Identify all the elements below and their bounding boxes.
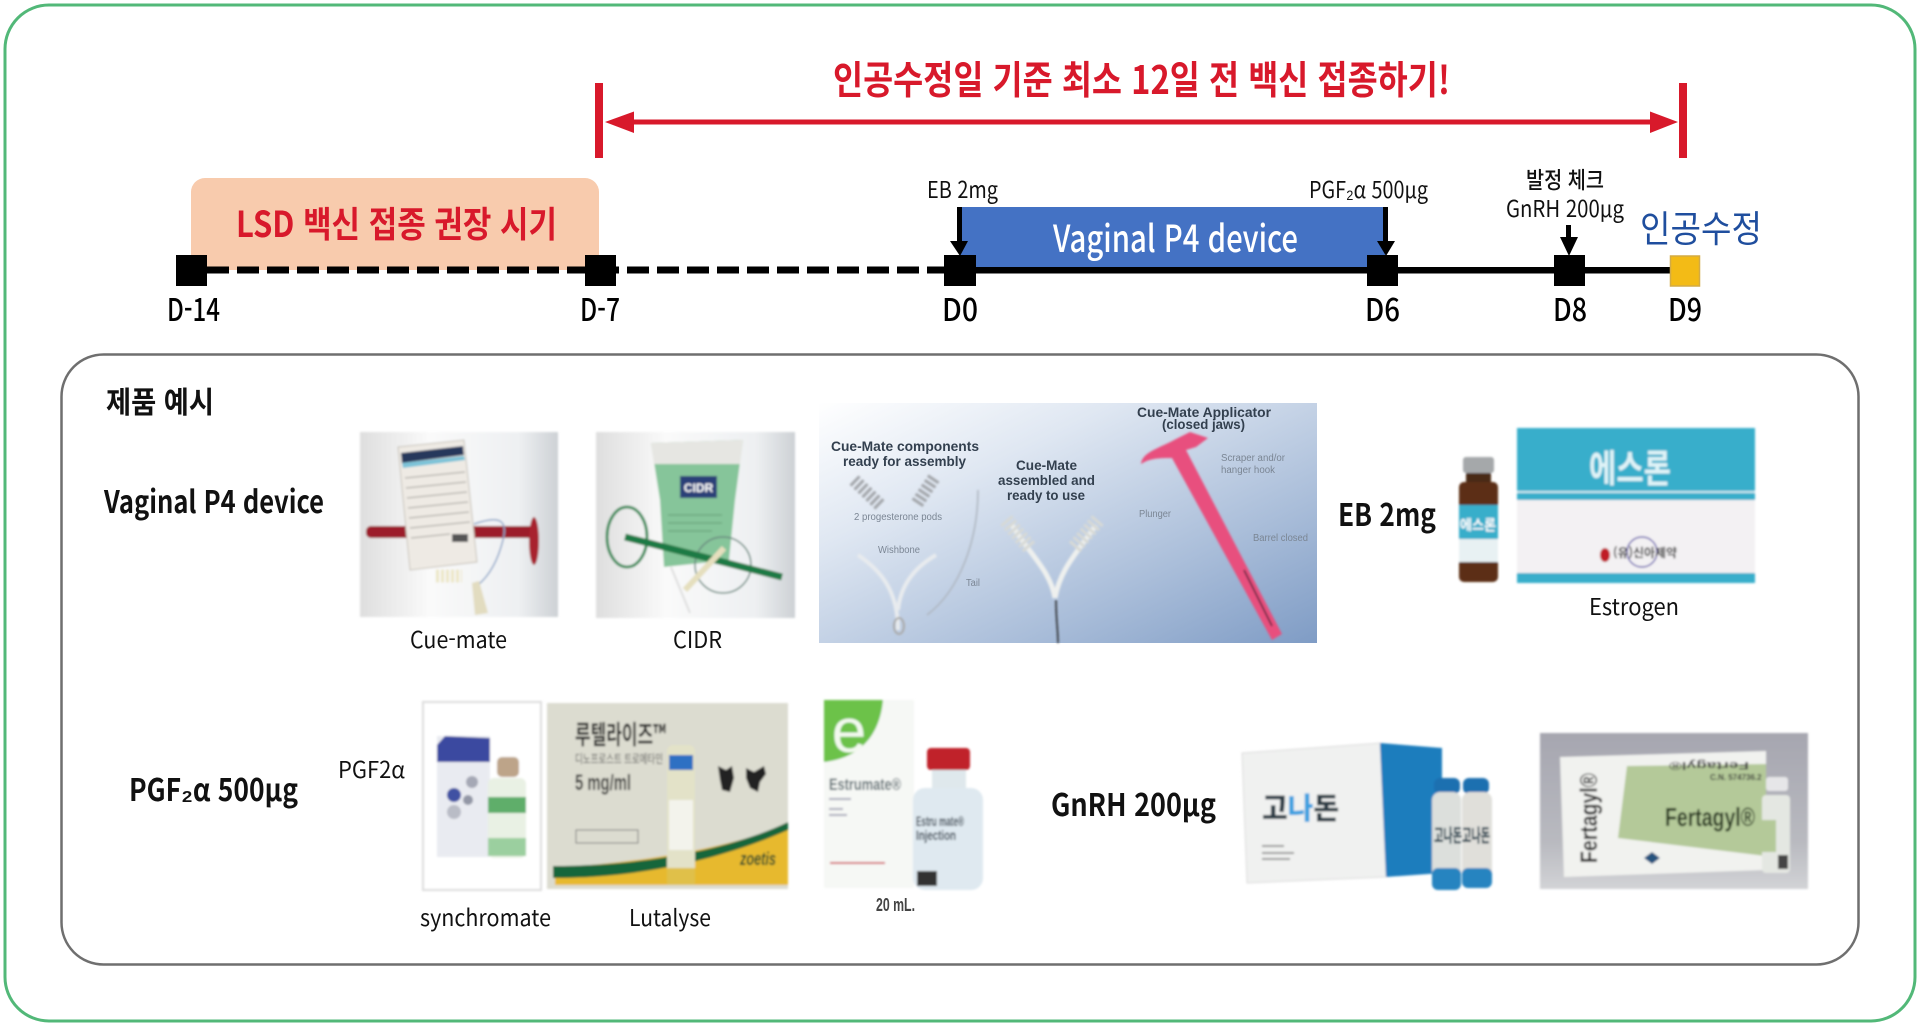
red double arrow span — [595, 83, 1687, 158]
photo: Lutalyse box: 5 mg/ml — [575, 770, 631, 795]
photo: estrogen vial: 에스론 — [1460, 515, 1496, 535]
photo: CIDR — [596, 432, 795, 618]
photo: GnRH box and vials: 고나돈 — [1262, 784, 1339, 828]
photo: estrogen vial — [1459, 457, 1498, 582]
treatment labels above timeline — [927, 161, 1624, 224]
photo: Lutalyse box: 루텔라이즈™ — [575, 715, 666, 752]
row label: EB 2mg: EB 2mg — [1338, 490, 1436, 535]
diagram: Cue-Mate components: Cue-Mate Applicator — [1137, 404, 1272, 420]
photo: GnRH box and vials: 고나돈고나돈 — [1434, 822, 1490, 848]
diagram: Cue-Mate components: (closed jaws) — [1162, 416, 1245, 432]
diagram: Cue-Mate components: Cue-Mate components — [831, 438, 979, 454]
timeline — [176, 255, 1700, 286]
timeline day labels: D0 — [942, 285, 978, 330]
treatment labels above timeline: GnRH 200μg — [1506, 190, 1624, 224]
treatment labels above timeline: 발정 체크 — [1526, 161, 1604, 195]
icon: applicator — [1141, 432, 1282, 640]
photo: Lutalyse box: zoetis — [739, 849, 776, 869]
photo: Estrumate — [824, 697, 983, 890]
timeline day labels: D8 — [1553, 285, 1587, 330]
arrow: GnRH at D8 — [1560, 225, 1578, 256]
AI day label: 인공수정 — [1640, 199, 1762, 253]
arrow: PGF injection at D6 — [1377, 207, 1395, 256]
photo: Fertagyl: Fertagyl® — [1576, 773, 1603, 863]
photo: estrogen box: (유)신아제약 — [1613, 544, 1677, 561]
diagram: Cue-Mate components: Barrel closed — [1253, 533, 1308, 544]
arrow: EB injection at D0 — [950, 207, 968, 256]
photo: Fertagyl: Fertagyl® — [1669, 759, 1749, 771]
photo: synchromate — [423, 702, 541, 890]
timeline day labels: D6 — [1365, 285, 1400, 330]
icon: assembled device — [1006, 520, 1098, 643]
recommended vaccination period box: LSD 백신 접종 권장 시기 — [236, 196, 557, 248]
timeline day labels: D-7 — [580, 285, 620, 330]
photo: Cue-mate — [360, 432, 558, 617]
diagram: Cue-Mate components: assembled and — [998, 472, 1095, 488]
heading: vaccinate at least 12 days before AI: 인공수정일 기준 최소 12일 전 백신 접종하기! — [833, 50, 1450, 106]
caption: synchromate: synchromate — [420, 899, 551, 933]
diagram: Cue-Mate components: ready to use — [1007, 487, 1085, 503]
photo: estrogen box — [1517, 428, 1755, 583]
photo: Estrumate: Estru mate® — [916, 813, 964, 829]
photo: Estrumate: Injection — [916, 827, 956, 843]
row label: GnRH 200ug: GnRH 200μg — [1051, 780, 1216, 825]
diagram: Cue-Mate components: Tail — [966, 578, 980, 589]
photo: Estrumate: Estrumate® — [829, 775, 901, 794]
diagram: Cue-Mate components: 2 progesterone pods — [854, 512, 942, 523]
panel heading: 제품 예시 — [106, 378, 214, 422]
Vaginal P4 device bar: Vaginal P4 device — [1052, 209, 1298, 263]
diagram: Cue-Mate components: Cue-Mate — [1016, 457, 1077, 473]
recommended vaccination period box — [191, 178, 599, 270]
timeline day labels — [167, 285, 1702, 330]
row label: PGF2a 500ug: PGF₂α 500μg — [129, 765, 298, 810]
photo: GnRH box and vials — [1242, 743, 1492, 890]
side label: PGF2a: PGF2α — [338, 751, 405, 785]
diagram: Cue-Mate components: Wishbone — [878, 545, 920, 556]
timeline day labels: D-14 — [167, 285, 220, 330]
timeline day labels: D9 — [1668, 285, 1702, 330]
caption: Estrogen: Estrogen — [1589, 588, 1679, 622]
diagram: Cue-Mate components: hanger hook — [1221, 465, 1276, 476]
caption: CIDR: CIDR — [673, 621, 722, 655]
photo: CIDR: CIDR — [684, 481, 713, 495]
diagram: Cue-Mate components — [819, 403, 1317, 643]
photo: Lutalyse box: 디노프로스트 트로메타민 — [575, 750, 663, 767]
treatment labels above timeline: EB 2mg — [927, 171, 998, 205]
panel: product examples — [62, 354, 1858, 964]
photo: Fertagyl — [1540, 733, 1808, 889]
caption: Lutalyse: Lutalyse — [629, 899, 711, 933]
treatment labels above timeline: PGF₂α 500μg — [1309, 171, 1428, 205]
diagram: Cue-Mate components: Scraper and/or — [1221, 453, 1286, 464]
photo: Estrumate: e — [832, 697, 866, 766]
photo: Fertagyl: C.N. 574736.2 — [1710, 773, 1762, 782]
diagram: Cue-Mate components: ready for assembly — [843, 453, 966, 469]
icon: wishbone and tail — [858, 490, 978, 634]
caption: 20 mL: 20 mL. — [876, 895, 915, 915]
photo: estrogen box: 에스론 — [1589, 438, 1671, 493]
row label: Vaginal P4 device: Vaginal P4 device — [103, 477, 324, 522]
icon: progesterone pods — [854, 478, 934, 505]
diagram: Cue-Mate components: Plunger — [1139, 509, 1172, 520]
photo: Lutalyse box — [547, 703, 788, 889]
Vaginal P4 device bar — [960, 207, 1385, 268]
caption: Cue-mate: Cue-mate — [410, 621, 507, 655]
photo: Fertagyl: Fertagyl® — [1665, 802, 1755, 832]
